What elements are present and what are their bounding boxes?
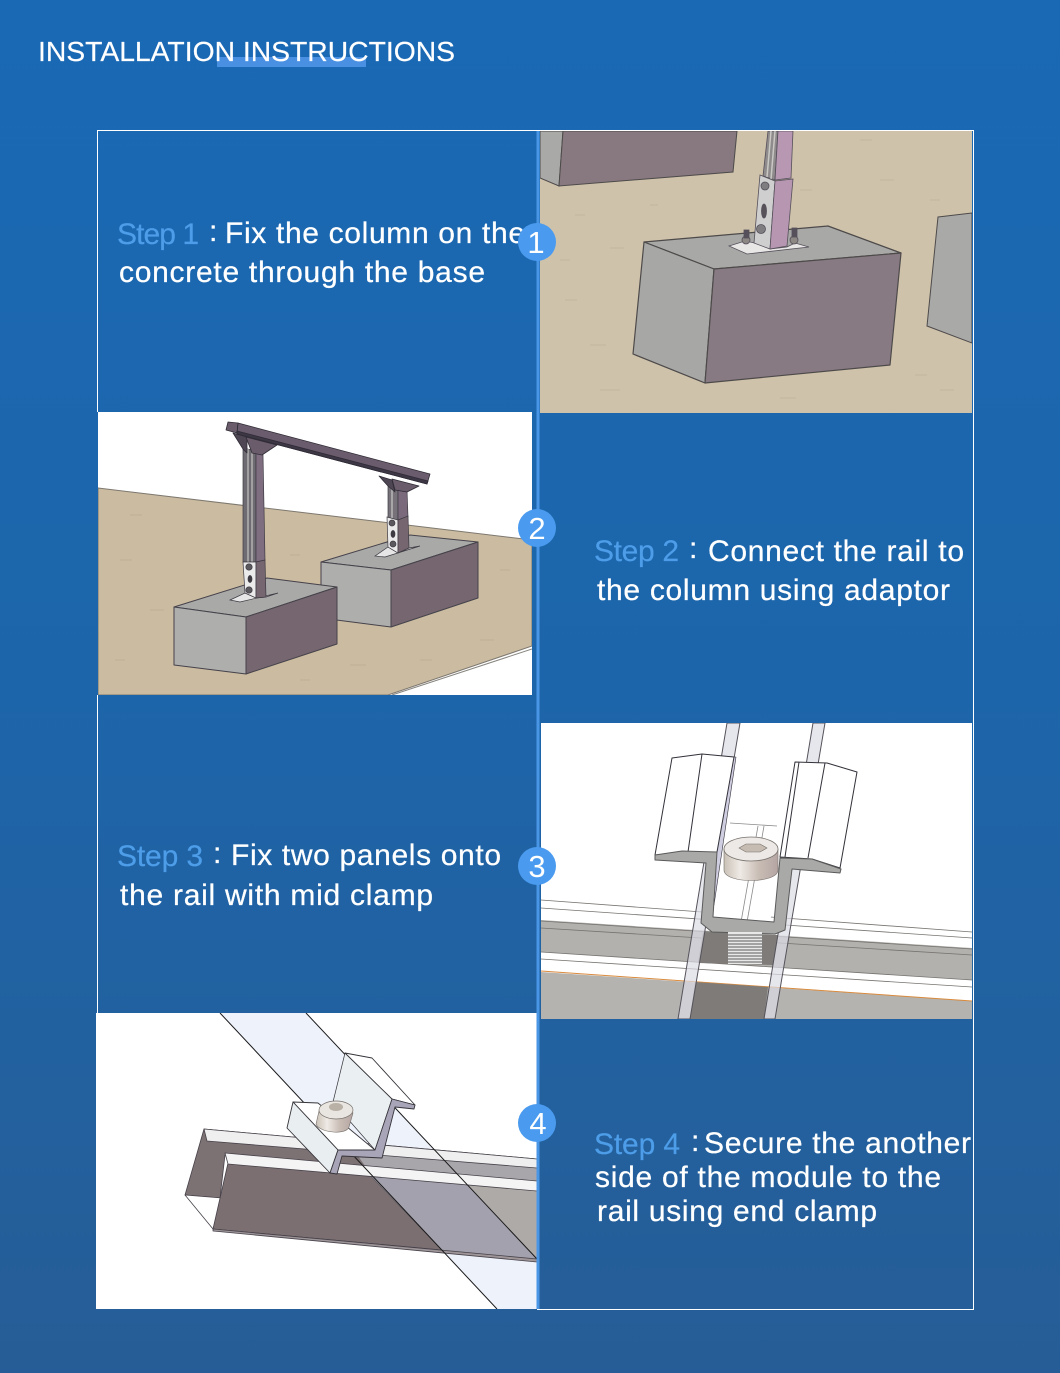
step 1 text: Fix the column on the <box>225 217 525 250</box>
step badge 1: 1 <box>527 225 545 260</box>
step 1 text <box>117 215 525 289</box>
concrete block <box>633 226 901 383</box>
step badge 4 <box>518 1104 556 1142</box>
step 3 text: Step 3 <box>117 840 203 873</box>
rail with brackets <box>226 422 430 492</box>
step badge 2: 2 <box>528 511 546 546</box>
step 1 text: Step 1 <box>117 218 199 251</box>
step 4 text: rail using end clamp <box>597 1195 877 1228</box>
bolt <box>724 837 778 880</box>
step badge 3 <box>518 847 556 885</box>
panel frame <box>98 130 974 1310</box>
panel: step 2 image <box>98 412 532 695</box>
step 3 text: : <box>213 837 221 870</box>
center timeline <box>536 131 540 1309</box>
step badge 1 <box>518 223 556 261</box>
module strips <box>678 723 825 1019</box>
column and base <box>729 131 809 254</box>
far column <box>375 485 420 557</box>
step 4 text <box>594 1125 971 1228</box>
step 3 text <box>117 837 501 912</box>
step 4 text: Secure the another <box>704 1127 971 1160</box>
panel: step 1 image <box>540 131 972 413</box>
mid clamp <box>655 754 857 934</box>
step 1 text: : <box>209 215 217 248</box>
step badge 4: 4 <box>529 1106 547 1141</box>
thread <box>728 932 762 964</box>
step 2 text: Step 2 <box>594 535 679 568</box>
panel: step 3 image <box>541 723 972 1019</box>
far block <box>321 535 478 627</box>
near block <box>174 578 337 674</box>
rail <box>541 900 972 1019</box>
step 4 text: : <box>691 1125 699 1158</box>
bolt <box>316 1101 353 1132</box>
step badge 3: 3 <box>528 849 546 884</box>
module glass <box>220 1013 537 1309</box>
rail <box>185 1129 537 1262</box>
step 3 text: the rail with mid clamp <box>120 879 433 912</box>
step 4 text: side of the module to the <box>595 1161 941 1194</box>
step 1 text: concrete through the base <box>119 256 485 289</box>
step 3 text: Fix two panels onto <box>231 839 501 872</box>
step 2 text: Connect the rail to <box>708 535 964 568</box>
step 2 text: the column using adaptor <box>597 574 950 607</box>
step badge 2 <box>518 509 556 547</box>
title: INSTALLATION INSTRUCTIONS <box>38 36 455 67</box>
back right block <box>927 213 972 343</box>
end clamp <box>287 1053 415 1174</box>
panel: step 4 image <box>96 1013 537 1309</box>
step 4 text: Step 4 <box>594 1128 680 1161</box>
step 2 text: : <box>689 532 697 565</box>
step 2 text <box>594 532 964 607</box>
module edges <box>220 1013 537 1309</box>
near column <box>230 448 278 602</box>
back left block <box>540 131 737 186</box>
